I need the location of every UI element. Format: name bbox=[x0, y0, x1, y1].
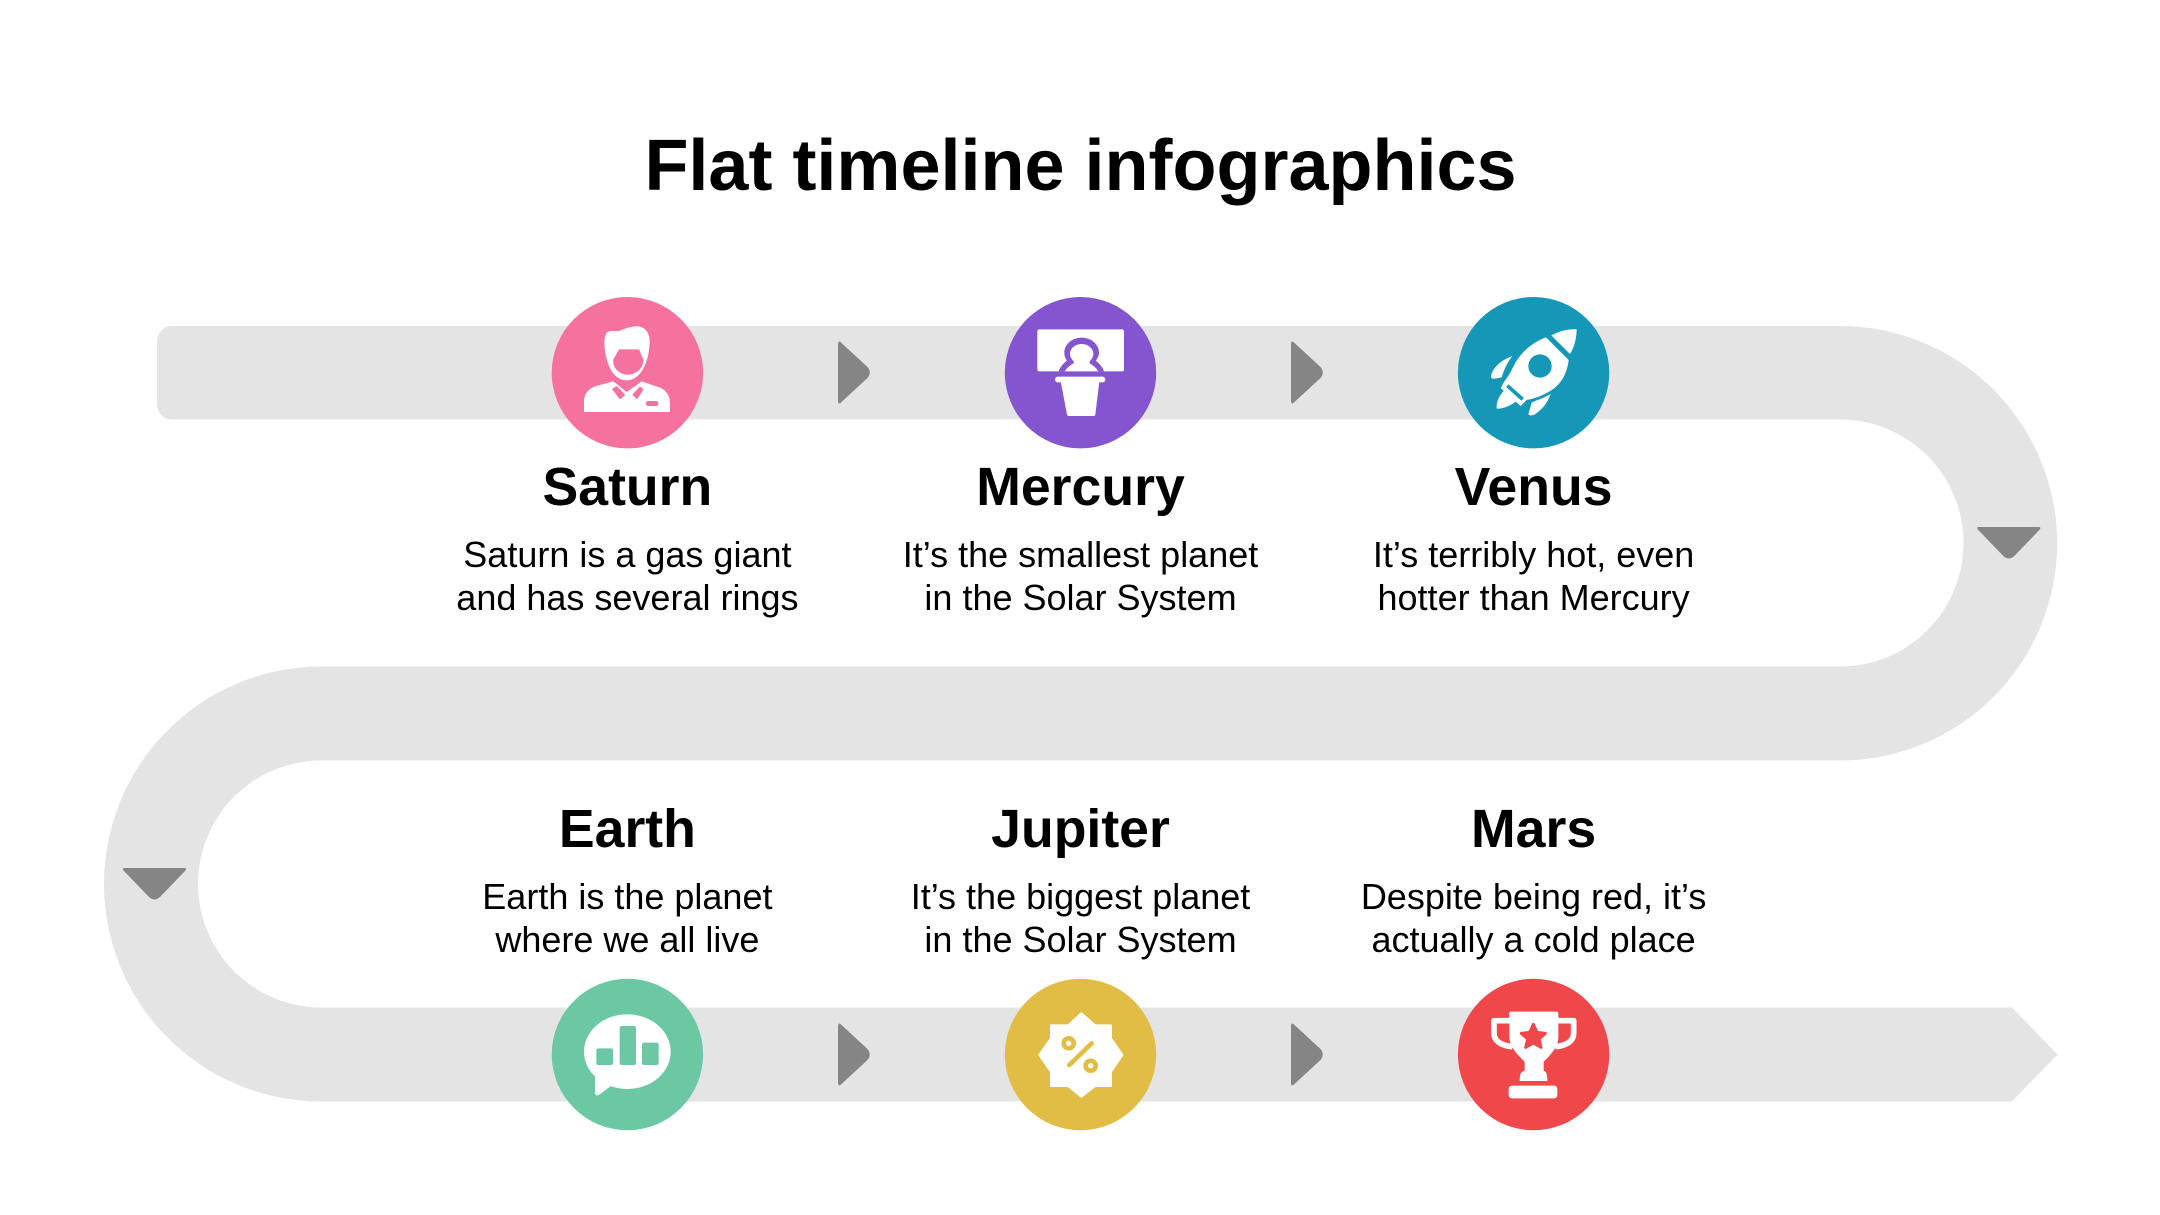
step: Saturn bbox=[456, 297, 799, 618]
step: Venus bbox=[1373, 297, 1694, 618]
description: hotter than Mercury bbox=[1378, 577, 1690, 618]
icon: chat bubble with bars bbox=[552, 979, 703, 1130]
icon: person bbox=[552, 297, 703, 448]
title: Flat timeline infographics bbox=[644, 126, 1517, 206]
heading: Mars bbox=[1471, 799, 1596, 859]
description: Despite being red, it’s bbox=[1361, 876, 1706, 917]
icon: trophy bbox=[1458, 979, 1609, 1130]
step: Mercury bbox=[903, 297, 1258, 618]
heading: Jupiter bbox=[991, 799, 1170, 859]
description: in the Solar System bbox=[924, 919, 1237, 960]
heading: Saturn bbox=[543, 457, 712, 517]
icon: rocket bbox=[1458, 297, 1609, 448]
icon: speaker at podium bbox=[1005, 297, 1156, 448]
icon: percent badge bbox=[1005, 979, 1156, 1130]
description: It’s the biggest planet bbox=[911, 876, 1250, 917]
description: in the Solar System bbox=[924, 577, 1237, 618]
description: It’s the smallest planet bbox=[903, 534, 1258, 575]
description: and has several rings bbox=[456, 577, 799, 618]
serpentine timeline track bbox=[104, 326, 2057, 1102]
description: Saturn is a gas giant bbox=[463, 534, 792, 575]
step: Earth bbox=[482, 799, 772, 1130]
description: actually a cold place bbox=[1371, 919, 1696, 960]
description: where we all live bbox=[494, 919, 759, 960]
step: Jupiter bbox=[911, 799, 1250, 1130]
arrows along the track bbox=[123, 341, 2040, 1086]
heading: Earth bbox=[559, 799, 696, 859]
heading: Mercury bbox=[976, 457, 1185, 517]
step: Mars bbox=[1361, 799, 1706, 1130]
description: Earth is the planet bbox=[482, 876, 772, 917]
description: It’s terribly hot, even bbox=[1373, 534, 1694, 575]
heading: Venus bbox=[1455, 457, 1613, 517]
